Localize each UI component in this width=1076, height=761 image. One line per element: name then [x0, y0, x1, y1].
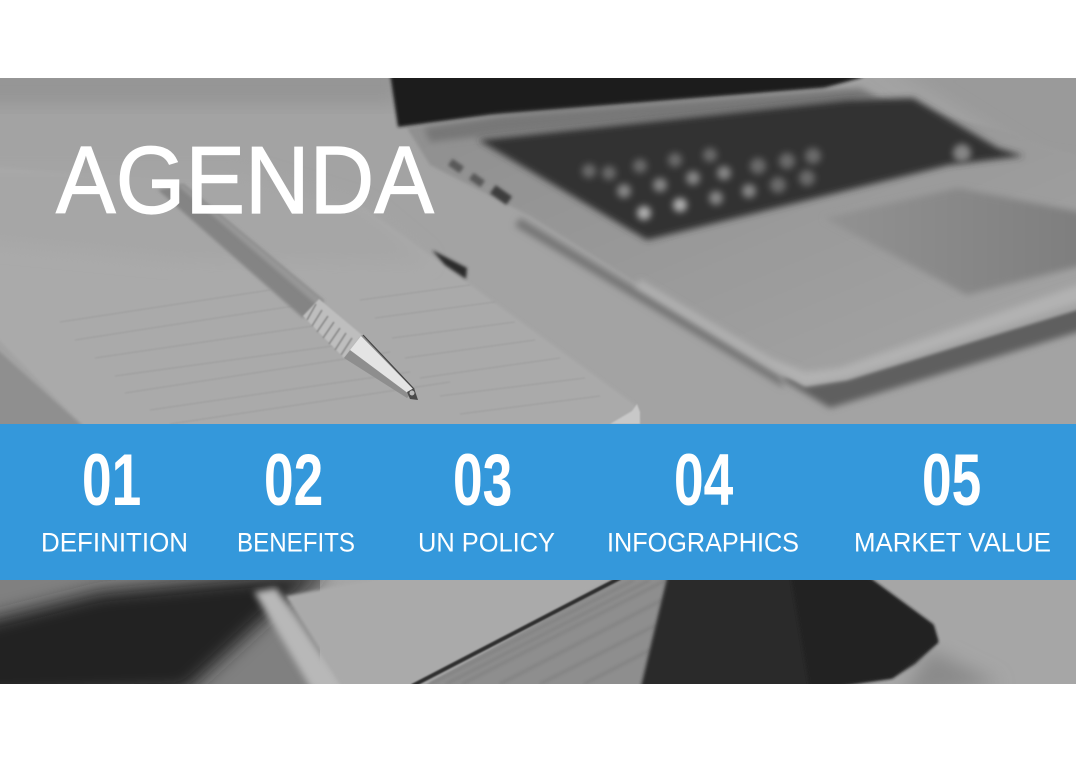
pen — [158, 184, 418, 400]
item 02 benefits: 02 — [264, 439, 323, 521]
dark object at lower left — [0, 580, 332, 684]
item 04 infographics — [607, 439, 799, 558]
keyboard keys — [582, 144, 971, 220]
desk upper right — [930, 78, 1076, 154]
item 04 infographics: 04 — [674, 439, 734, 521]
notebook slot — [432, 250, 467, 279]
notebook corner — [610, 404, 640, 424]
book pages — [427, 580, 667, 684]
lower left floor — [0, 580, 320, 684]
item 02 benefits — [237, 439, 355, 558]
title: AGENDA — [56, 127, 434, 234]
keyboard — [478, 98, 1024, 240]
laptop shadow — [780, 296, 1076, 408]
notebook — [0, 165, 639, 430]
notebook fold shadow — [0, 352, 81, 424]
laptop front edge — [636, 274, 1076, 386]
page stripes — [430, 666, 464, 682]
lower right shadow — [905, 650, 990, 684]
item 05 market value: 05 — [922, 439, 981, 521]
item 05 market value — [854, 439, 1051, 558]
book cover — [285, 588, 328, 650]
lid hinge strip — [424, 88, 880, 142]
item 05 market value: MARKET VALUE — [854, 528, 1051, 558]
notebook upper blur — [0, 170, 430, 262]
item 01 definition: 01 — [82, 439, 141, 521]
laptop lid — [388, 78, 864, 129]
item 03 un policy — [418, 439, 555, 558]
item 01 definition — [41, 439, 188, 558]
notebook ruled lines — [60, 285, 600, 424]
item 03 un policy: 03 — [453, 439, 512, 521]
blurred stick — [254, 588, 345, 690]
agenda slide — [0, 78, 1076, 684]
laptop body — [408, 124, 1076, 387]
laptop left edge shadow — [515, 218, 784, 388]
item 01 definition: DEFINITION — [41, 528, 188, 558]
book edge line — [412, 578, 620, 686]
lower desk — [0, 580, 1076, 684]
item 04 infographics: INFOGRAPHICS — [607, 528, 799, 558]
item 02 benefits: BENEFITS — [237, 528, 355, 558]
desk — [0, 60, 1076, 450]
phone — [639, 580, 940, 684]
blue agenda band — [0, 424, 1076, 580]
laptop side ports — [448, 159, 512, 205]
trackpad — [824, 188, 1076, 295]
item 03 un policy: UN POLICY — [418, 528, 555, 558]
